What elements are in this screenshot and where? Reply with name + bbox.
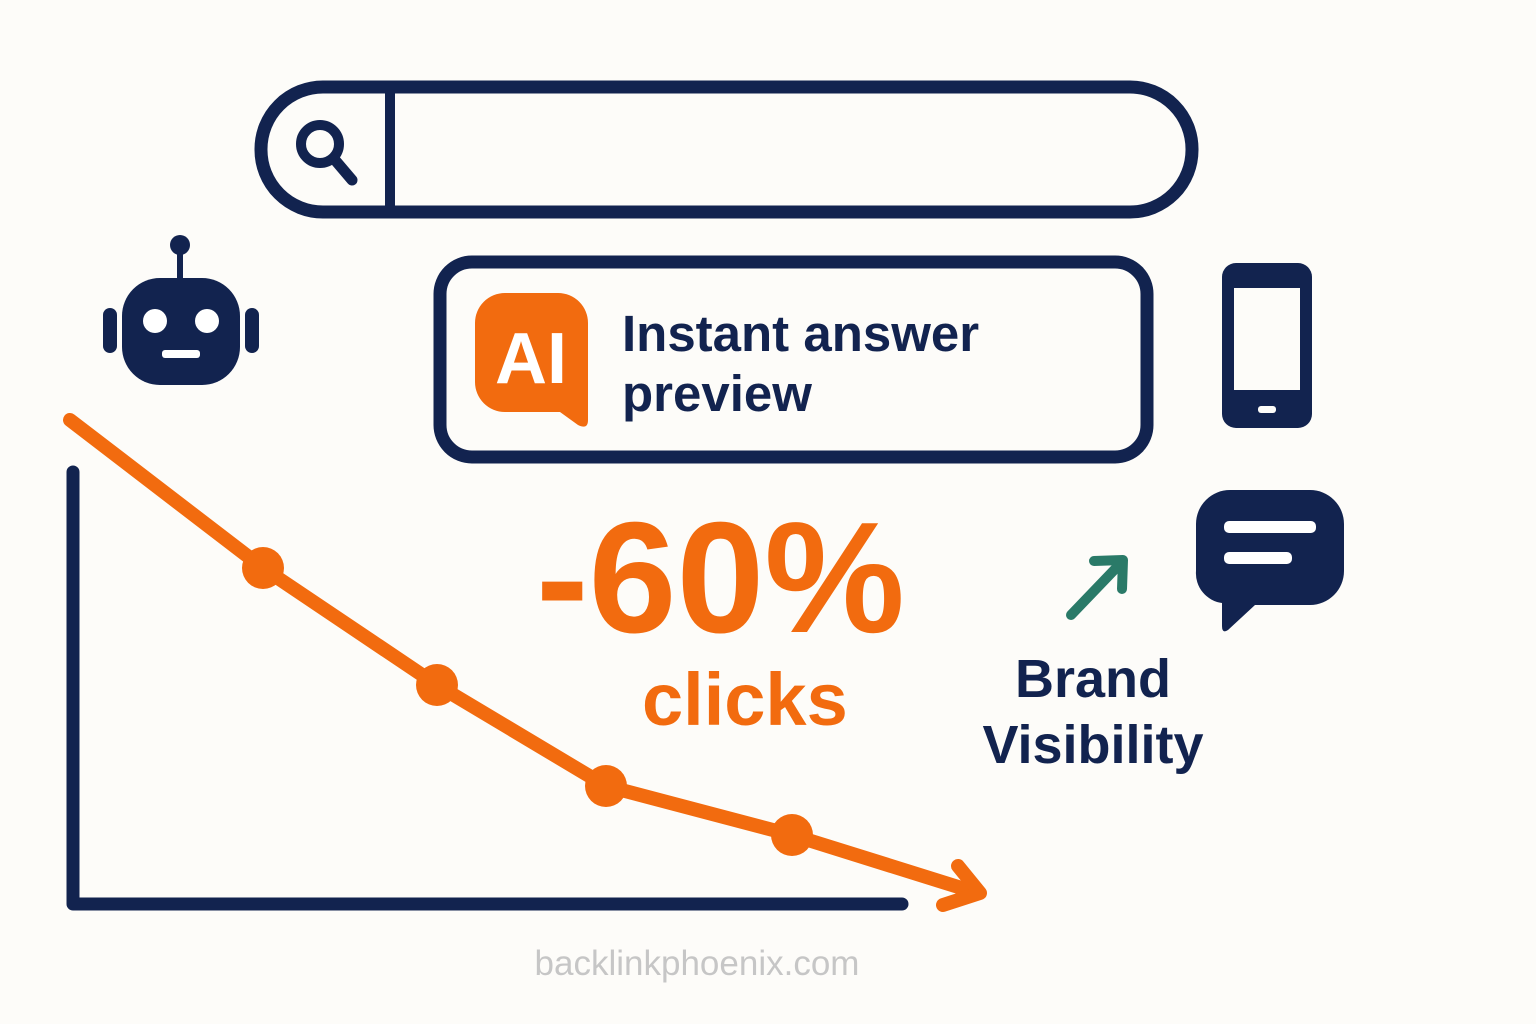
text: instant answer preview: Instant answer — [622, 305, 979, 362]
footer: backlinkphoenix.com — [535, 944, 859, 983]
icon: green arrow — [1071, 560, 1123, 615]
text: instant answer preview — [622, 305, 979, 422]
icon: robot — [103, 235, 259, 385]
text: brand visibility: Visibility — [982, 715, 1204, 775]
chart: declining clicks — [70, 420, 980, 905]
text: brand visibility: Brand — [1015, 649, 1171, 709]
stat label: clicks: clicks — [642, 658, 848, 741]
AI answer box — [440, 262, 1147, 457]
icon: AI badge: AI — [495, 319, 567, 399]
icon: magnifier — [301, 125, 352, 180]
text: instant answer preview: preview — [622, 365, 812, 422]
text: brand visibility — [982, 649, 1204, 775]
stat: -60%: -60% — [536, 490, 905, 666]
icon: AI badge — [475, 293, 588, 427]
icon: phone — [1222, 263, 1312, 428]
icon: chat bubble — [1196, 490, 1344, 631]
search bar — [261, 87, 1192, 212]
